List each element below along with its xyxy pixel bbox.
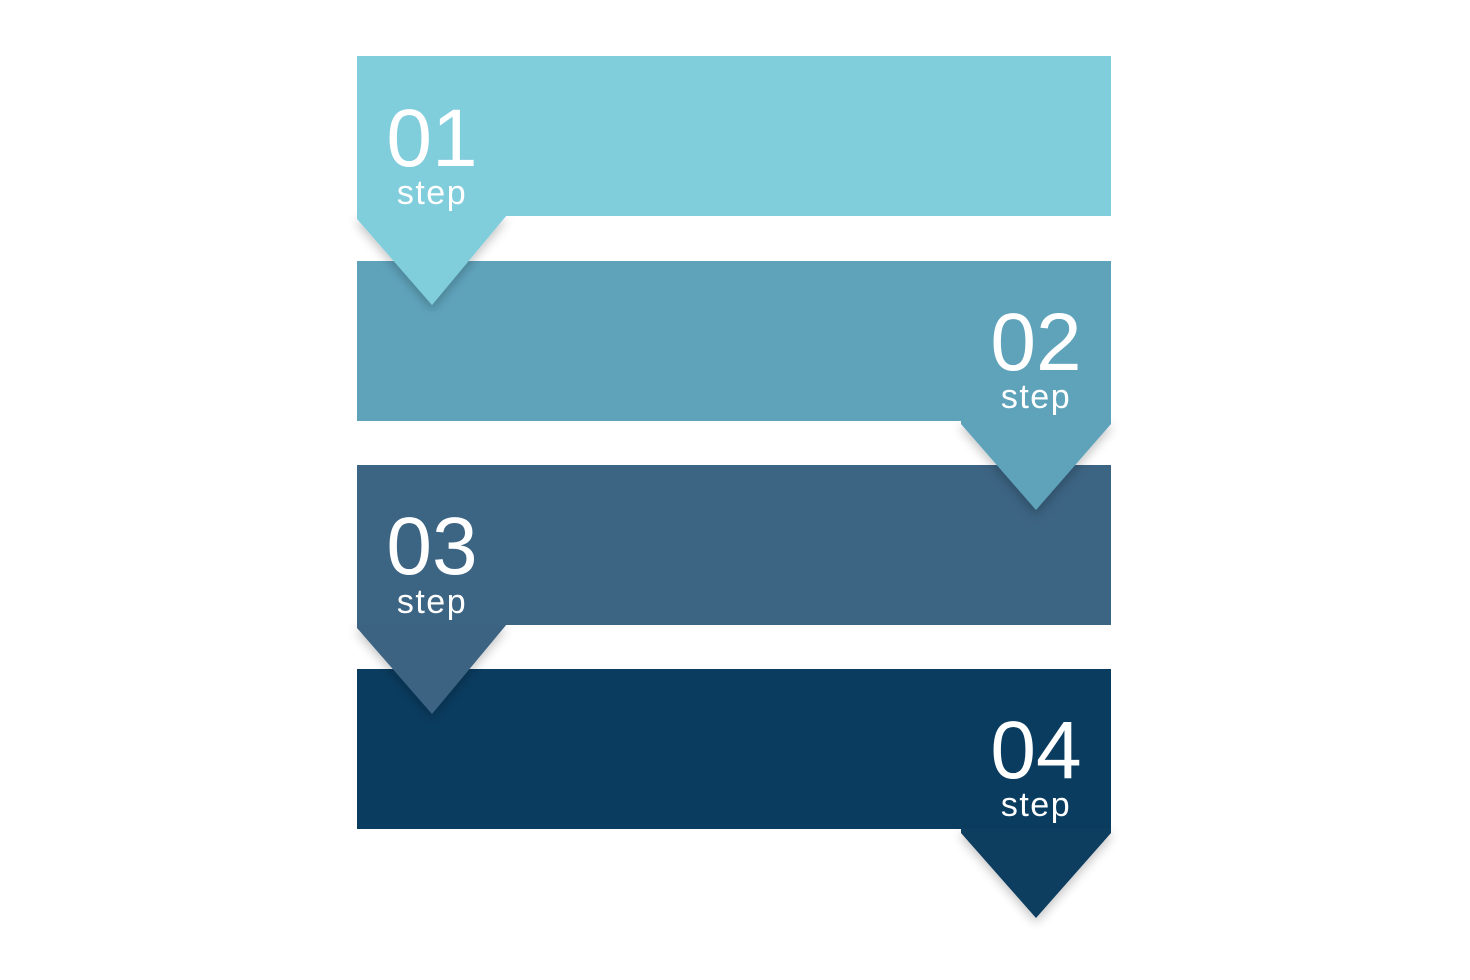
step 1 bar bbox=[357, 56, 1111, 305]
step 4 bar bbox=[357, 669, 1111, 918]
label 2: 02 bbox=[990, 297, 1082, 388]
arrow 4 bbox=[961, 828, 1111, 918]
label 1: 01 bbox=[386, 93, 478, 184]
label 3: step bbox=[397, 583, 467, 621]
arrow 3 bbox=[357, 624, 507, 714]
arrow 1 bbox=[357, 215, 507, 305]
step 3 bar bbox=[357, 465, 1111, 714]
label 1: step bbox=[397, 174, 467, 212]
label 3: 03 bbox=[386, 501, 478, 592]
label 2: step bbox=[1001, 378, 1071, 416]
label 4: 04 bbox=[990, 705, 1082, 796]
step 2 bar bbox=[357, 261, 1111, 510]
label 4: step bbox=[1001, 786, 1071, 824]
arrow 2 bbox=[961, 420, 1111, 510]
